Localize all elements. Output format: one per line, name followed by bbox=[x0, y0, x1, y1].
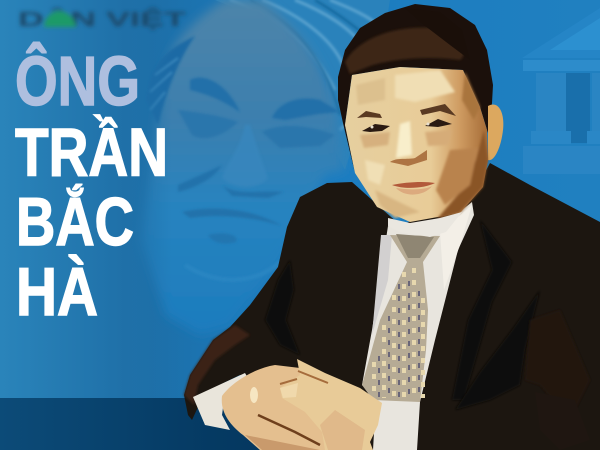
eyes bbox=[362, 119, 452, 132]
title bbox=[15, 41, 168, 330]
logo: blurred masthead: DÂN VIỆT bbox=[18, 7, 186, 31]
faded portrait in background bbox=[140, 0, 390, 335]
ghost nose bbox=[222, 125, 268, 187]
ghost hair bbox=[215, 0, 390, 170]
mouth bbox=[392, 182, 435, 188]
title: BẮC bbox=[16, 183, 134, 260]
icon: faded bank building bbox=[522, 8, 600, 174]
face bbox=[345, 67, 488, 222]
nose bbox=[390, 150, 427, 166]
right hand bbox=[280, 359, 382, 450]
title: HÀ bbox=[16, 254, 98, 330]
left fade panel bbox=[0, 0, 172, 398]
hair bbox=[338, 4, 493, 173]
bottom band bbox=[0, 398, 600, 450]
suit sleeve highlights bbox=[184, 325, 250, 405]
shirt bbox=[362, 202, 474, 450]
left hand bbox=[222, 365, 325, 450]
tie bbox=[362, 234, 440, 402]
title: TRẦN bbox=[15, 114, 168, 190]
ghost eyes bbox=[178, 110, 335, 148]
collar bbox=[388, 212, 462, 237]
cuff bbox=[193, 373, 248, 430]
brows bbox=[357, 104, 456, 118]
portrait: man in suit bbox=[184, 4, 600, 450]
title: ÔNG bbox=[15, 41, 140, 120]
ghost face bbox=[140, 0, 345, 335]
suit bbox=[184, 163, 600, 450]
ghost mouth bbox=[182, 209, 282, 226]
logo: blurred masthead bbox=[18, 7, 186, 31]
ghost brows bbox=[190, 78, 340, 120]
ear bbox=[488, 104, 503, 160]
face shading bbox=[356, 70, 488, 220]
